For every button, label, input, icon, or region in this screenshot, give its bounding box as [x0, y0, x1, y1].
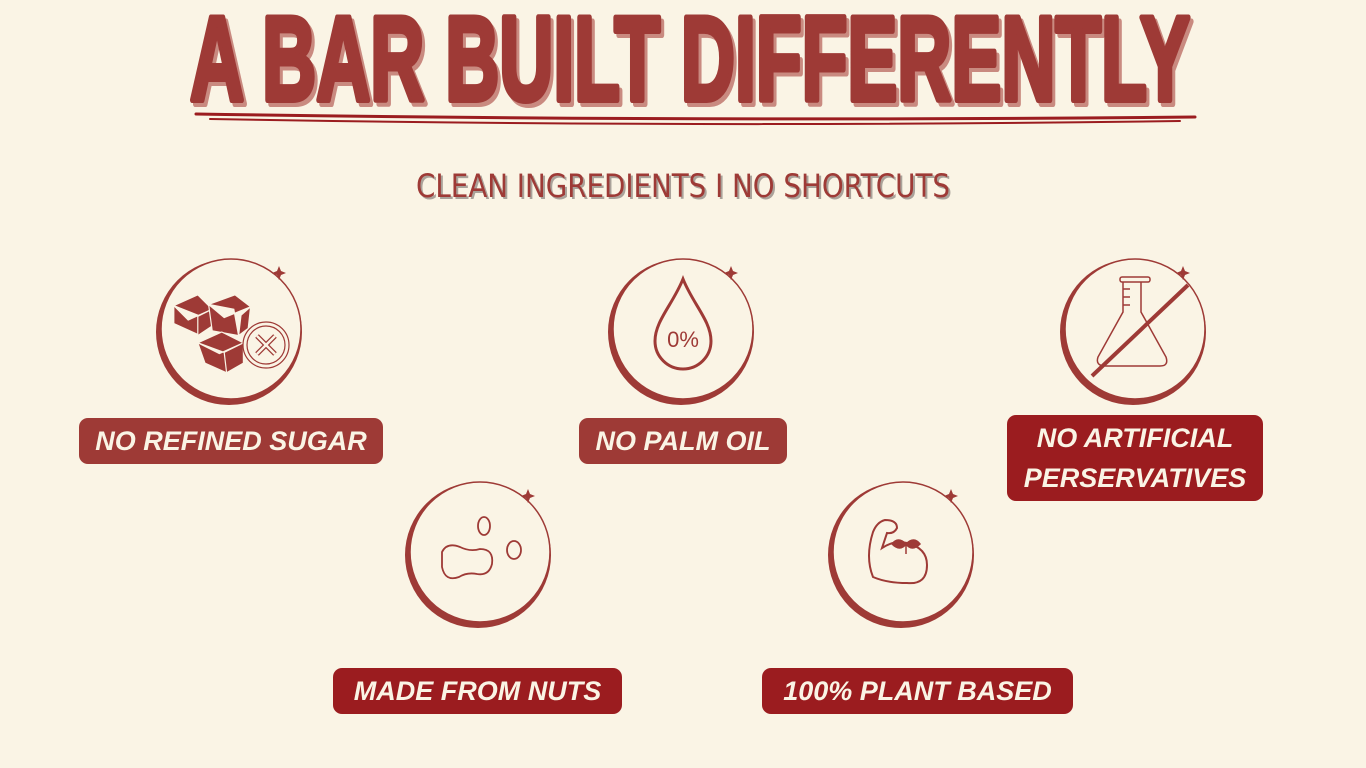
icon: sugar cubes — [156, 259, 302, 405]
label: no artificial preservatives — [1007, 415, 1263, 501]
label: no refined sugar: NO REFINED SUGAR — [95, 426, 367, 456]
label: no artificial preservatives: NO ARTIFICIAL — [1037, 423, 1233, 453]
label: made from nuts — [333, 668, 622, 714]
icon: oil drop — [608, 259, 754, 405]
icon: nuts — [405, 482, 551, 628]
icon: crossed flask — [1060, 259, 1206, 405]
icon: oil drop: 0% — [667, 327, 699, 352]
label: made from nuts: MADE FROM NUTS — [354, 676, 601, 706]
icon: muscle with leaf — [828, 482, 974, 628]
subtitle: CLEAN INGREDIENTS I NO SHORTCUTS — [416, 167, 950, 205]
label: no palm oil: NO PALM OIL — [596, 426, 770, 456]
underline — [196, 114, 1195, 124]
label: plant based — [762, 668, 1073, 714]
subtitle: CLEAN INGREDIENTS I NO SHORTCUTS — [418, 169, 952, 207]
label: no artificial preservatives: PERSERVATIVES — [1024, 463, 1246, 493]
label: no refined sugar — [79, 418, 383, 464]
label: no palm oil — [579, 418, 787, 464]
label: plant based: 100% PLANT BASED — [783, 676, 1052, 706]
